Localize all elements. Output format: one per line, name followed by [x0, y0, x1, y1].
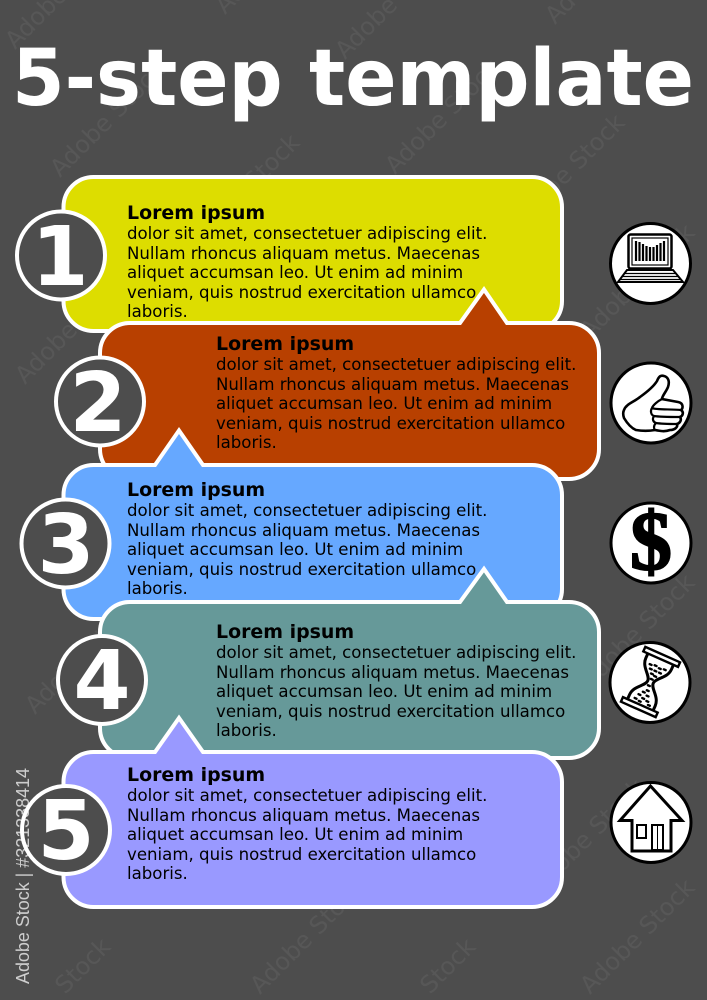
- number badge 1: [17, 210, 105, 305]
- text: Adobe Stock: [574, 568, 700, 694]
- text: Adobe Stock: [179, 128, 305, 254]
- panel: step 3: Nullam rhoncus aliquam metus. Maecenas: [127, 521, 480, 540]
- panel: step 2: Nullam rhoncus aliquam metus. Maecenas: [216, 375, 569, 394]
- panel: step 5: laboris.: [127, 864, 188, 883]
- panel: step 1: Nullam rhoncus aliquam metus. Maecenas: [127, 244, 480, 263]
- panel: step 1: dolor sit amet, consectetuer adipiscing elit.: [127, 224, 487, 243]
- stock watermark id: Adobe Stock | #321338414: [12, 768, 33, 984]
- panel: step 1: aliquet accumsan leo. Ut enim ad minim: [127, 263, 463, 282]
- text: Stock: [49, 932, 116, 999]
- panel: step 3: dolor sit amet, consectetuer adipiscing elit.: [127, 501, 487, 520]
- icon: dollar sign: [611, 495, 691, 588]
- text: Adobe Stock: [574, 218, 700, 344]
- panel: step 5: veniam, quis nostrud exercitation ullamco: [127, 845, 476, 864]
- text: Adobe Stock: [244, 873, 370, 999]
- icon: house: [611, 782, 691, 862]
- panel: step 2: Lorem ipsum: [216, 333, 354, 355]
- panel: step 3: laboris.: [127, 579, 188, 598]
- text: Adobe Stock: [574, 873, 700, 999]
- number badge 3: 3: [37, 498, 95, 593]
- panel: step 3: veniam, quis nostrud exercitation ullamco: [127, 560, 476, 579]
- panel: step 4: [100, 569, 599, 758]
- number badge 3: [22, 498, 110, 593]
- panel: step 1: Lorem ipsum: [127, 202, 265, 224]
- text: Adobe Stock: [504, 108, 630, 234]
- icon: laptop: [610, 224, 690, 304]
- panel: step 4: laboris.: [216, 721, 277, 740]
- panel: step 3: Lorem ipsum: [127, 479, 265, 501]
- text: Adobe Stock: [79, 738, 205, 864]
- text: Adobe Stock: [19, 593, 145, 719]
- panel: step 2: aliquet accumsan leo. Ut enim ad minim: [216, 394, 552, 413]
- panel: step 2: [100, 290, 599, 479]
- number badge 4: 4: [73, 634, 131, 729]
- number badge 1: 1: [31, 210, 89, 305]
- icon: thumbs up: [611, 363, 691, 443]
- panel: step 3: [64, 430, 562, 619]
- panel: step 4: Lorem ipsum: [216, 621, 354, 643]
- number badge 2: 2: [69, 356, 127, 451]
- panel: step 5: aliquet accumsan leo. Ut enim ad minim: [127, 825, 463, 844]
- panel: step 4: dolor sit amet, consectetuer adipiscing elit.: [216, 643, 576, 662]
- number badge 5: [22, 784, 110, 879]
- panel: step 5: Lorem ipsum: [127, 764, 265, 786]
- text: Stock: [414, 932, 481, 999]
- panel: step 4: aliquet accumsan leo. Ut enim ad minim: [216, 682, 552, 701]
- text: Adobe Stock: [379, 53, 505, 179]
- panel: step 2: dolor sit amet, consectetuer adipiscing elit.: [216, 355, 576, 374]
- title: 5-step template: [12, 34, 694, 124]
- text: Adobe Stock: [9, 263, 135, 389]
- number badge 4: [58, 634, 146, 729]
- number badge 5: 5: [37, 784, 95, 879]
- panel: step 5: dolor sit amet, consectetuer adipiscing elit.: [127, 786, 487, 805]
- icon: hourglass: [610, 642, 690, 722]
- panel: step 1: laboris.: [127, 302, 188, 321]
- text: Adobe Stock: [44, 56, 170, 182]
- panel: step 4: Nullam rhoncus aliquam metus. Maecenas: [216, 663, 569, 682]
- panel: step 2: laboris.: [216, 433, 277, 452]
- number badge 2: [56, 356, 144, 451]
- panel: step 5: [64, 718, 562, 907]
- text: Adobe Stock: [524, 773, 650, 899]
- panel: step 5: Nullam rhoncus aliquam metus. Maecenas: [127, 806, 480, 825]
- icon: dollar sign: $: [630, 495, 672, 588]
- panel: step 2: veniam, quis nostrud exercitation ullamco: [216, 414, 565, 433]
- panel: step 3: aliquet accumsan leo. Ut enim ad minim: [127, 540, 463, 559]
- panel: step 1: veniam, quis nostrud exercitation ullamco: [127, 283, 476, 302]
- panel: step 1: [64, 177, 562, 331]
- panel: step 4: veniam, quis nostrud exercitation ullamco: [216, 702, 565, 721]
